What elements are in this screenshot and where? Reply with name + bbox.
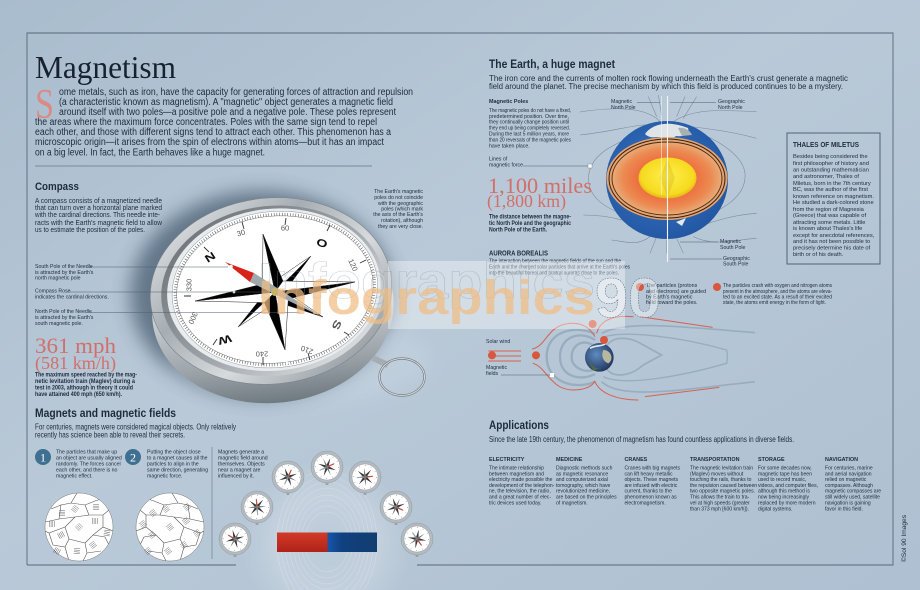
application: storage: used to record music,	[758, 477, 806, 483]
panel: thales of miletus: Miletus, born in the 7th century	[793, 181, 871, 187]
magnetic poles text: predetermined position. Over time,	[489, 114, 569, 120]
statistic: 361 mph: (581 km/h)	[35, 353, 116, 374]
magnetic poles text: have taken place.	[489, 144, 530, 150]
label: lines of magnetic force	[489, 156, 592, 168]
compass cardinal letters	[203, 236, 344, 347]
step 2	[125, 449, 208, 480]
application: storage: STORAGE	[758, 457, 785, 463]
statistic: 1,100 miles	[487, 173, 592, 234]
application: transportation: This allows the train to tra-	[690, 494, 750, 500]
application: cranes: can lift heavy metallic	[624, 472, 673, 478]
compass degree numbers: 240	[256, 350, 268, 358]
magnet caption: influenced by it.	[218, 474, 254, 480]
magnetic poles text: than 20 reversals of the magnetic poles	[489, 138, 571, 144]
magnetic poles text: they end up being completely reversed.	[489, 126, 570, 132]
bar magnet	[277, 532, 377, 552]
statistic: 361 mph: test in 2003, although in theory it could	[35, 386, 133, 392]
intro paragraph: the areas where the maximum force concentrates. Poles with the same sign tend to repel	[35, 117, 377, 128]
intro paragraph: microscopic origin—it arises from the spin of electrons within atoms—but it has an impact	[35, 137, 384, 148]
magnet caption: Magnets generate a	[218, 450, 264, 456]
panel: thales of miletus: Besides being considered the	[793, 154, 868, 160]
application: navigation: For centuries, marine	[825, 466, 873, 472]
aurora step 3: ted to an excited state. As a result of their excited	[723, 294, 832, 300]
compass shadow	[130, 191, 394, 399]
application: storage: For some decades now,	[758, 466, 812, 472]
application: medicine: Diagnostic methods such	[556, 466, 613, 472]
note: magnetic poles: poles do not coincide	[374, 195, 423, 201]
ocean and land	[606, 121, 728, 239]
application: medicine: are based on the principles	[556, 494, 617, 500]
watermark	[258, 253, 661, 329]
compass text: racts with the Earth's magnetic field to allow	[35, 220, 162, 227]
application: electricity: development of the telephon-	[489, 483, 555, 489]
panel: thales of miletus: THALES OF MILETUS	[793, 142, 859, 149]
compass cardinal letters: N	[203, 250, 218, 265]
panel: thales of miletus: except for anecdotal references,	[793, 233, 875, 239]
application: storage: videos, and computer files,	[758, 483, 818, 489]
magnetic poles text: The magnetic poles do not have a fixed,	[489, 108, 571, 114]
aurora step 2: The particles (protons	[646, 283, 698, 289]
panel: thales of miletus: and astronomer, Thales of	[793, 174, 859, 180]
application: electricity	[489, 457, 555, 506]
application: storage	[758, 457, 818, 512]
watermark: 90	[595, 266, 661, 329]
pole labels: North Pole	[611, 105, 636, 111]
application: navigation: favor in this field.	[825, 506, 863, 512]
note: magnetic poles: The Earth's magnetic	[374, 189, 423, 195]
step markers	[488, 320, 608, 359]
step 1: an object are usually aligned	[56, 456, 122, 462]
application: transportation: touching the rails, thanks to	[690, 477, 752, 483]
aurora step 3: The particles crash with oxygen and nitrogen atoms	[723, 283, 832, 289]
panel: thales of miletus: BC, was the author of the first	[793, 187, 868, 193]
compass text: A compass consists of a magnetized needle	[35, 198, 162, 205]
panel: thales of miletus: known reference on magnetism.	[793, 194, 874, 200]
aurora step 2: field toward the poles.	[646, 300, 698, 306]
compass degree numbers: 120	[346, 257, 360, 273]
compass needle	[225, 262, 322, 364]
application: navigation: navigation is gaining	[825, 500, 871, 506]
heading: magnets and magnetic fields: Magnets and magnetic fields	[35, 408, 176, 420]
step 1: magnetic effect.	[56, 474, 93, 480]
crust and mantle section	[606, 137, 728, 220]
compass cardinal letters: S	[329, 318, 344, 332]
compass degree numbers: 210	[300, 344, 314, 356]
number badge 2: 2	[130, 450, 136, 464]
magnet caption: magnetic field around	[218, 456, 268, 462]
intro paragraph: each other, and those with different signs tend to attract each other. This phenomenon has a	[35, 127, 391, 138]
application: storage: now being increasingly	[758, 494, 810, 500]
application: cranes: are infused with electric	[624, 483, 678, 489]
magnets intro: For centuries, magnets were considered magical objects. Only relatively	[35, 422, 236, 432]
label: south pole of the needle: north magnetic pole	[35, 276, 81, 282]
label: lines of magnetic force: magnetic force	[489, 162, 523, 168]
aurora step 2	[636, 283, 706, 306]
magnets intro	[35, 422, 236, 440]
application: medicine: of magnetism.	[556, 500, 588, 506]
application: cranes: electromagnetism.	[624, 500, 666, 506]
note: magnetic poles: poles (which mark	[381, 206, 423, 212]
compass degree numbers: 30	[236, 228, 246, 238]
application: electricity: ne, the television, the radio,	[489, 488, 551, 494]
compass degree numbers: 330	[184, 279, 194, 291]
statistic: 1,100 miles: tic North Pole and the geographic	[489, 221, 572, 227]
statistic: 1,100 miles: (1,800 km)	[487, 191, 566, 212]
aligned particle domains	[136, 493, 204, 561]
heading: aurora borealis: AURORA BOREALIS	[489, 250, 548, 258]
earth	[585, 343, 614, 372]
aurora step 3: present in the atmosphere, and the atoms are eleva-	[723, 289, 832, 295]
compass cardinal letters: W	[217, 332, 233, 347]
aurora text: into the beautiful boreal and austral auroras close to the poles.	[489, 270, 619, 276]
application: storage: although this method is	[758, 488, 810, 494]
intro paragraph: ome metals, such as iron, have the capacity for generating forces of attraction and repulsion	[59, 87, 413, 98]
small compasses around magnet	[219, 451, 433, 557]
step 1: randomly. The forces cancel	[56, 462, 121, 468]
label: magnetic fields	[486, 365, 554, 377]
compass degree numbers	[184, 224, 360, 358]
label: south pole of the needle	[35, 264, 228, 282]
random particle domains	[45, 493, 113, 561]
earth intro	[489, 74, 848, 91]
note: magnetic poles: with the geographic	[378, 201, 423, 207]
statistic: 361 mph: The maximum speed reached by the mag-	[35, 372, 137, 378]
application: transportation	[690, 457, 757, 512]
label: north pole of the needle	[35, 309, 300, 327]
label: north pole of the needle: North Pole of the Needle	[35, 309, 92, 315]
solar wind paths	[488, 316, 719, 400]
compass text: with the cardinal directions. This needle inte-	[34, 212, 160, 219]
statistic: 1,100 miles: 1,100 miles	[488, 173, 592, 198]
drop cap S: S	[35, 82, 54, 128]
pole labels: Geographic	[718, 99, 745, 105]
application: storage: replaced by more modern	[758, 500, 816, 506]
panel: thales of miletus: (Greece) that was capable of	[793, 213, 866, 219]
application: navigation: magnetic compasses are	[825, 488, 881, 494]
application: cranes: Cranes with big magnets	[624, 466, 681, 472]
step 1	[35, 449, 122, 480]
application: transportation: TRANSPORTATION	[690, 457, 740, 463]
application: transportation: The magnetic levitation train	[690, 466, 753, 472]
application: cranes: current, thanks to the	[624, 488, 672, 494]
pole labels	[611, 99, 750, 268]
compass degree numbers: 60	[281, 224, 289, 232]
note: magnetic poles: rotation), although	[381, 218, 423, 224]
application: medicine: and computerized axial	[556, 477, 608, 483]
statistic: 361 mph: netic levitation train (Maglev) during a	[35, 379, 136, 385]
application: transportation: vel at high speeds (greater	[690, 500, 750, 506]
application: electricity: and a great number of elec-	[489, 494, 551, 500]
compass cardinal letters: O	[315, 236, 329, 251]
panel: thales of miletus: an outstanding mathematician	[793, 168, 869, 174]
note: magnetic poles: the axis of the Earth's	[373, 212, 423, 218]
panel: thales of miletus: He studied a dark-colored stone	[793, 200, 874, 206]
copyright: ©Sol 90 Images	[900, 515, 908, 562]
intro paragraph: (a characteristic known as magnetism). A "magnetic" object generates a magnetic field	[59, 97, 393, 108]
compass face	[164, 201, 385, 378]
step 2: to a magnet causes all the	[147, 456, 208, 462]
pole labels: South Pole	[720, 245, 745, 251]
aurora step 3: state, the atoms emit energy in the form of light.	[723, 300, 826, 306]
statistic: 361 mph: 361 mph	[35, 333, 116, 358]
note: magnetic poles	[373, 189, 423, 230]
magnetic poles text: Magnetic Poles	[489, 99, 528, 105]
statistic: 1,100 miles: The distance between the magne-	[489, 214, 571, 220]
earth intro: The iron core and the currents of molten rock flowing underneath the Earth's crust generate a magnetic	[489, 74, 848, 83]
application: navigation: compasses. Although	[825, 483, 873, 489]
label: compass rose: indicates the cardinal directions.	[35, 294, 109, 300]
pole labels: Magnetic	[611, 99, 632, 105]
application: navigation: NAVIGATION	[825, 457, 858, 463]
application: medicine	[556, 457, 617, 506]
application: transportation: than 373 mph [600 km/h]).	[690, 506, 749, 512]
application: transportation: the repulsion caused between	[690, 483, 757, 489]
application: cranes: phenomenon known as	[624, 494, 677, 500]
application: transportation: two opposite magnetic poles.	[690, 488, 755, 494]
application: cranes: CRANES	[624, 457, 648, 463]
panel: thales of miletus: birth or of his death.	[793, 252, 844, 258]
application: electricity: The intimate relationship	[489, 466, 544, 472]
intro paragraph	[35, 82, 413, 158]
application: cranes: objects. These magnets	[624, 477, 678, 483]
application: navigation	[825, 457, 881, 512]
aurora text	[489, 258, 630, 276]
pole labels: Geographic	[723, 256, 750, 262]
compass text	[34, 198, 162, 234]
label: lines of magnetic force: Lines of	[489, 156, 508, 162]
statistic: 1,100 miles: North Pole of the Earth.	[489, 228, 547, 234]
number badge 1: 1	[40, 450, 46, 464]
panel: thales of miletus	[787, 133, 880, 264]
heading: applications: Applications	[489, 418, 549, 432]
watermark: Infographics	[258, 253, 595, 309]
earth intro: field around the planet. The precise mechanism by which this field is produced continues to be a mystery.	[489, 82, 843, 91]
application: electricity: tric devices used today.	[489, 500, 541, 506]
aurora step 3	[713, 283, 832, 306]
magnetic field around bar magnet	[242, 460, 412, 590]
panel: thales of miletus: and it has not been possible to	[793, 239, 870, 245]
step 2: magnetic force.	[147, 474, 182, 480]
application: electricity: ELECTRICITY	[489, 457, 525, 463]
aurora step 2: by Earth's magnetic	[646, 294, 693, 300]
note: magnetic poles: they are very close.	[378, 224, 423, 230]
label: north pole of the needle: is attracted by the Earth's	[35, 315, 94, 321]
intro paragraph: on a big level. In fact, the Earth behaves like a huge magnet.	[35, 148, 265, 158]
aurora magnetosphere diagram	[488, 316, 755, 400]
panel: thales of miletus: is known about Thales's life	[793, 226, 862, 232]
compass ring and stem	[373, 358, 424, 396]
step 1: The particles that make up	[56, 450, 117, 456]
application: electricity: between magnetism and	[489, 472, 544, 478]
aurora text: Earth and the charged solar particles that arrive at the Earth's poles	[489, 264, 630, 270]
inner core	[638, 158, 696, 198]
intro paragraph: around itself with two poles—a positive pole and a negative pole. These poles represent	[59, 107, 396, 118]
magnet caption	[218, 450, 268, 480]
magnet caption: near a magnet are	[218, 468, 261, 474]
label: south pole of the needle: South Pole of the Needle	[35, 264, 93, 270]
label: magnetic fields: Magnetic	[486, 365, 507, 371]
compass heading: Compass	[35, 181, 79, 193]
magnetic poles text: they continually change position until	[489, 120, 569, 126]
aurora step 2: and electrons) are guided	[646, 289, 706, 295]
magnetic poles text	[489, 99, 571, 150]
panel: thales of miletus: from the region of Magnesia	[793, 207, 865, 213]
application: electricity: electricity made possible the	[489, 477, 553, 483]
application: navigation: relied on magnetic	[825, 477, 867, 483]
label: solar wind: Solar wind	[486, 339, 510, 345]
panel: thales of miletus: precisely determine his date of	[793, 245, 871, 251]
magnetic poles text: During the last 5 million years, more	[489, 132, 569, 138]
application: medicine: MEDICINE	[556, 457, 583, 463]
statistic: 361 mph	[35, 333, 137, 398]
field bands	[547, 326, 755, 392]
compass text: that can turn over a horizontal plane marked	[35, 205, 162, 212]
label: magnetic fields: fields	[486, 371, 499, 377]
application: navigation: still widely used, satellite	[825, 494, 880, 500]
statistic: 361 mph: have attained 400 mph (650 km/h).	[35, 392, 122, 398]
panel: thales of miletus: attracting some metals. Little	[793, 220, 865, 226]
pole labels: South Pole	[723, 262, 748, 268]
step 2: same direction, generating	[147, 468, 208, 474]
application: transportation: (Maglev) moves without	[690, 472, 744, 478]
compass degree numbers: 300	[186, 310, 200, 326]
step 2: particles to align in the	[147, 462, 199, 468]
compass text: us to estimate the position of the poles.	[35, 227, 145, 234]
label: compass rose	[35, 288, 270, 300]
label: compass rose: Compass Rose	[35, 288, 71, 294]
pole labels: Magnetic	[720, 239, 741, 245]
compass illustration	[130, 186, 430, 415]
magnet caption: themselves. Objects	[218, 462, 265, 468]
earth axis lines	[662, 96, 668, 262]
aurora text: The interaction between the magnetic fields of the sun and the	[489, 258, 621, 264]
heading: the earth, a huge magnet: The Earth, a huge magnet	[489, 59, 615, 71]
application: medicine: tomography, which have	[556, 483, 611, 489]
application: cranes	[624, 457, 681, 506]
earth cross-section globe	[606, 121, 728, 239]
panel: thales of miletus: first philosopher of history and	[793, 161, 869, 167]
compass major ticks	[184, 218, 366, 365]
title: Magnetism	[35, 49, 176, 85]
step 2: Putting the object close	[147, 450, 201, 456]
application: medicine: revolutionized medicine,	[556, 488, 610, 494]
application: storage: digital systems.	[758, 506, 792, 512]
compass rose	[195, 234, 355, 350]
application: storage: magnetic tape has been	[758, 472, 812, 478]
compass case	[141, 186, 403, 415]
magnets intro: recently has science been able to reveal their secrets.	[35, 430, 185, 440]
label: south pole of the needle: is attracted by the Earth's	[35, 270, 94, 276]
applications intro: Since the late 19th century, the phenomenon of magnetism has found countless applications in diverse fields.	[489, 435, 794, 444]
application: navigation: and aerial navigation	[825, 472, 872, 478]
watermark: Infographics	[258, 272, 595, 325]
step 1: each other, and there is no	[56, 468, 118, 474]
application: medicine: as magnetic resonance	[556, 472, 608, 478]
earth magnetic field lines	[580, 95, 757, 253]
pole labels: North Pole	[718, 105, 743, 111]
label: north pole of the needle: south magnetic pole.	[35, 321, 83, 327]
